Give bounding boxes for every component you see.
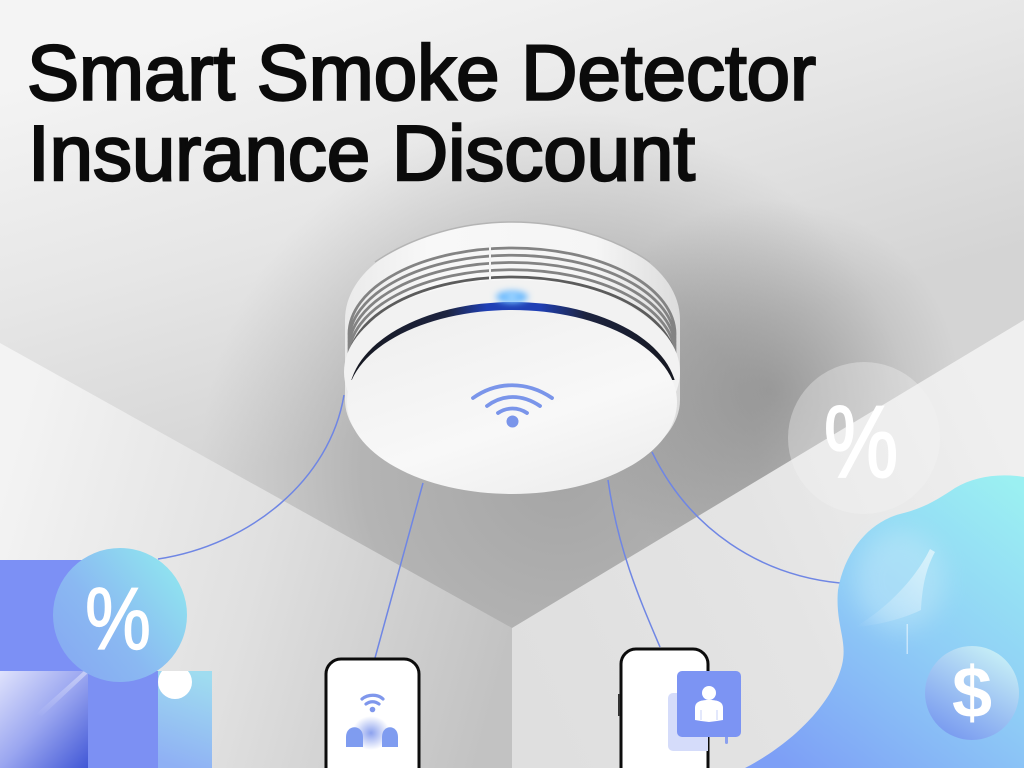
left discount graphic: [0, 548, 212, 768]
vent slats: [349, 248, 675, 449]
right bar: [158, 671, 212, 768]
lower body band: [344, 280, 680, 464]
dollar coin: $: [952, 653, 992, 733]
connector lines: [158, 395, 840, 658]
icon: wifi: [473, 385, 552, 428]
percent badge: %: [85, 570, 151, 668]
light square: [0, 671, 88, 768]
percent badge: [53, 548, 187, 682]
detector face: [347, 310, 677, 494]
icon: connected arches: [346, 716, 398, 750]
blue block: [0, 560, 100, 671]
status light ring: [351, 302, 675, 380]
light card: [668, 693, 708, 751]
phone right: [618, 649, 741, 768]
drip: [725, 730, 728, 744]
title: Smart Smoke Detector: [27, 28, 816, 116]
phone left: [326, 659, 419, 768]
light streak: [855, 549, 935, 627]
top right percent badge: [788, 362, 940, 514]
icon: phone wifi: [362, 695, 383, 712]
light glow: [855, 530, 945, 630]
icon: user card: [677, 671, 741, 737]
smoke detector: [344, 222, 680, 494]
detector body: [345, 222, 680, 490]
status light glow: [496, 291, 528, 303]
dollar coin: [925, 646, 1019, 740]
white half circle: [158, 671, 192, 699]
right blue blob: [745, 475, 1024, 768]
slat divider: [489, 244, 491, 281]
title: [27, 28, 816, 197]
top right percent badge: %: [824, 385, 898, 499]
middle bar: [88, 671, 158, 768]
title: Insurance Discount: [28, 109, 695, 197]
